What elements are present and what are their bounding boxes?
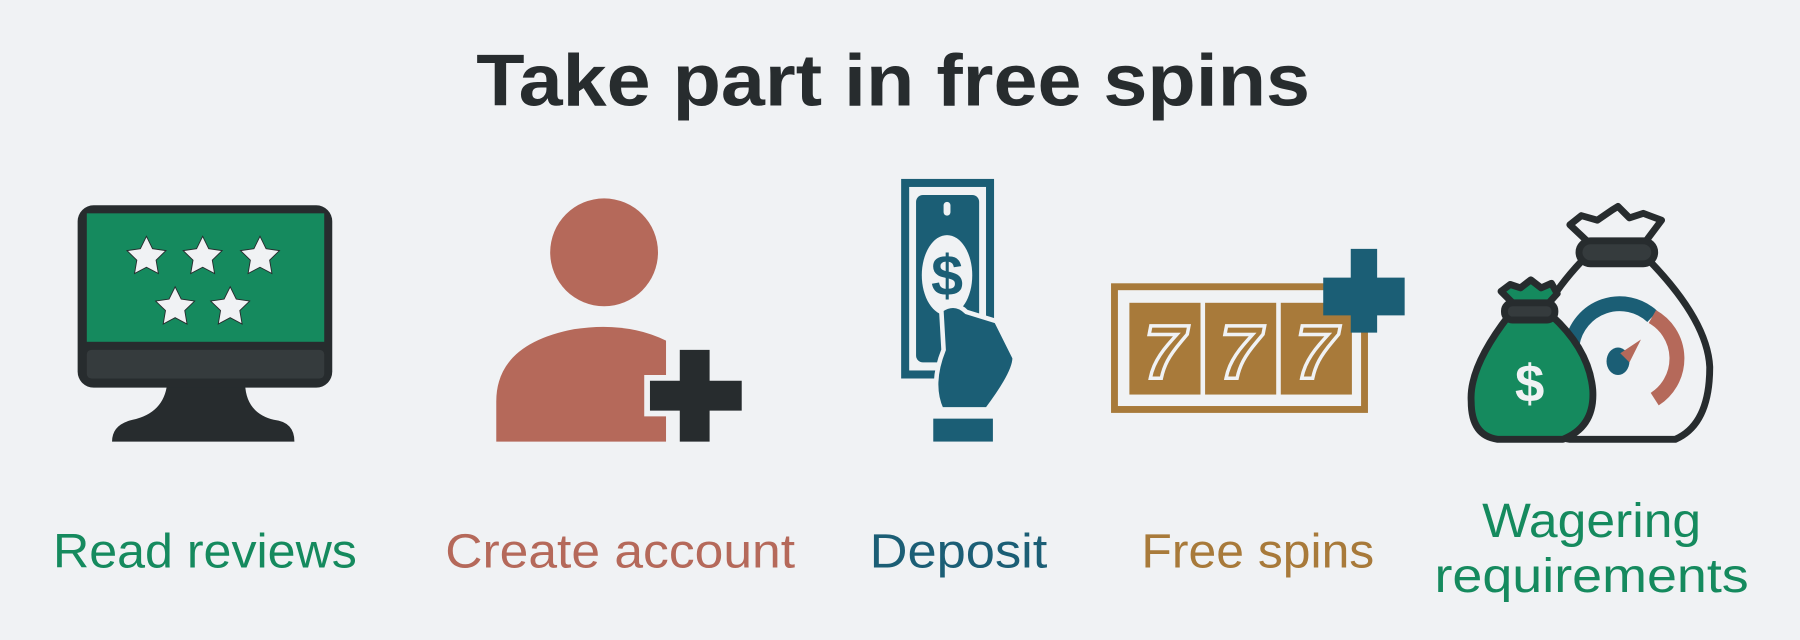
icon: deposit hand with bill <box>901 179 1015 442</box>
label: free spins: Free spins <box>1141 525 1374 579</box>
label: wagering requirements: requirements <box>1434 549 1749 603</box>
icon: money bags with gauge <box>1471 206 1710 439</box>
icon: slot machine 777: 7 <box>1220 310 1266 395</box>
label: wagering requirements <box>1434 494 1749 603</box>
icon: slot machine 777: 7 <box>1295 310 1341 395</box>
label: create account: Create account <box>445 525 796 579</box>
icon: money bags with gauge: $ <box>1515 354 1544 413</box>
icon: monitor with stars <box>78 205 332 442</box>
icon: slot machine 777 <box>1114 249 1405 409</box>
title: Take part in free spins <box>476 40 1310 122</box>
icon: create account person <box>496 198 742 442</box>
label: read reviews: Read reviews <box>53 525 357 579</box>
icon: deposit hand with bill: $ <box>931 244 963 308</box>
label: wagering requirements: Wagering <box>1482 494 1701 548</box>
label: deposit: Deposit <box>870 525 1048 579</box>
icon: slot machine 777: 7 <box>1144 310 1190 395</box>
